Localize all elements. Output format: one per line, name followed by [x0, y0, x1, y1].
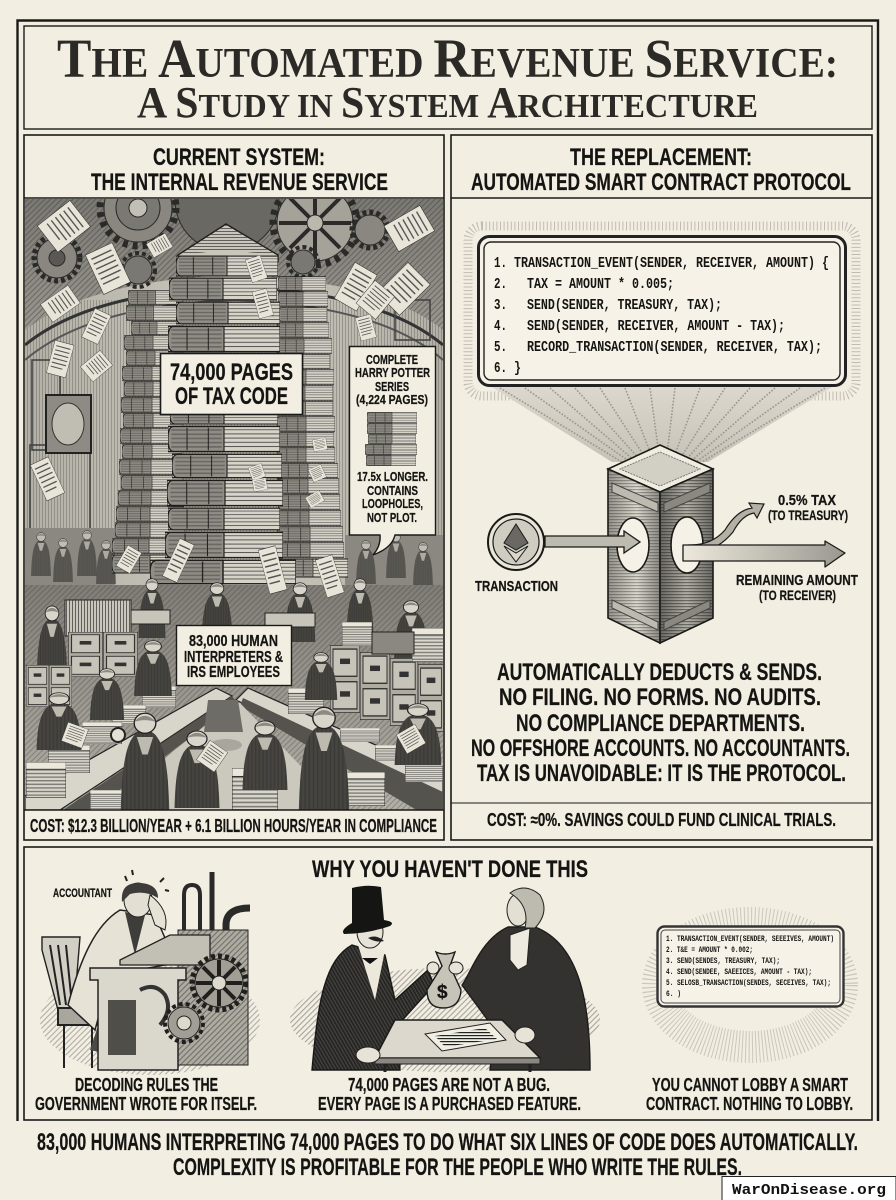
- callout: harry potter comparison: SERIES: [375, 379, 409, 394]
- title: [57, 28, 838, 127]
- callout: harry potter comparison: [350, 346, 436, 555]
- arrow: transaction into device: [545, 531, 640, 553]
- illustration: miniature contract with rays: 6. ): [666, 990, 681, 999]
- illustration: lobbyist handing money bag to official: $: [437, 982, 448, 1003]
- labels: tax flow: 0.5% TAX: [778, 492, 836, 509]
- labels: remaining amount: (TO RECEIVER): [759, 587, 836, 603]
- caption: purchased feature: [318, 1075, 581, 1114]
- gears: [165, 956, 246, 1042]
- callout: 74,000 pages of tax code: OF TAX CODE: [175, 383, 288, 410]
- panel: why you haven't done this: [24, 847, 872, 1120]
- code box: six-line smart contract: }: [514, 360, 521, 377]
- code box: six-line smart contract: 5.: [494, 339, 507, 356]
- labels: remaining amount: [736, 572, 858, 603]
- label: accountant: ACCOUNTANT: [53, 886, 112, 900]
- heading: why you haven't done this: WHY YOU HAVEN'T DONE THIS: [312, 856, 588, 883]
- labels: tax flow: (TO TREASURY): [768, 507, 848, 523]
- illustration: miniature contract with rays: 3. SEND(SENDES, TREASURY, TAX);: [666, 957, 780, 966]
- illustration: miniature contract with rays: 1. TRANSACTION_EVENT(SENDER, SEEEIVES, AMOUNT): [666, 935, 834, 944]
- code box: six-line smart contract: 6.: [494, 360, 507, 377]
- official: [462, 927, 590, 1070]
- caption: purchased feature: 74,000 PAGES ARE NOT A BUG.: [348, 1075, 550, 1095]
- caption: purchased feature: EVERY PAGE IS A PURCHASED FEATURE.: [318, 1094, 581, 1114]
- smart contract device: [608, 445, 713, 643]
- watermark: WarOnDisease.org: [732, 1182, 886, 1199]
- heading: the replacement: [471, 144, 851, 196]
- closing statement: [37, 1129, 858, 1181]
- callout: harry potter comparison: COMPLETE: [366, 352, 418, 367]
- code box: six-line smart contract: [478, 236, 846, 386]
- illustration: miniature contract with rays: 5. SELOSB_TRANSACTION(SENDES, SECEIVES, TAX);: [666, 979, 831, 988]
- heading: the replacement: THE REPLACEMENT:: [570, 144, 752, 171]
- illustration: tower of tax code books in the hall of clerks: [25, 148, 444, 812]
- lobbyist: [312, 945, 434, 1070]
- panel: current system: [24, 135, 444, 840]
- text block: what the protocol removes: [471, 659, 850, 787]
- illustration: miniature contract with rays: [658, 923, 844, 1047]
- caption: decoding rules: DECODING RULES THE: [75, 1075, 218, 1095]
- cost strip: current system: COST: $12.3 BILLION/YEAR + 6.1 BILLION HOURS/YEAR IN COMPLIANCE: [30, 816, 437, 836]
- labels: tax flow: [768, 492, 848, 523]
- ceiling: [25, 199, 443, 330]
- central stack of books: [150, 224, 328, 584]
- accountant figure: [68, 910, 168, 1030]
- illustration: lobbyist handing money bag to official: [290, 886, 600, 1072]
- heading: current system: THE INTERNAL REVENUE SERVICE: [91, 169, 388, 196]
- code box: six-line smart contract: 1.: [494, 255, 507, 272]
- caption: cannot lobby: [646, 1075, 853, 1114]
- callout: harry potter comparison: HARRY POTTER: [355, 365, 430, 380]
- table and document: [375, 1020, 540, 1058]
- paper stacks on desks: [26, 686, 443, 810]
- shading behind accountant: [40, 965, 260, 1075]
- heading: current system: CURRENT SYSTEM:: [153, 144, 325, 171]
- callout: 83,000 human interpreters: 83,000 HUMAN: [189, 633, 278, 650]
- callout: harry potter comparison: (4,224 PAGES): [356, 392, 428, 407]
- code box: six-line smart contract: 4.: [494, 318, 507, 335]
- rear desks and clerks: [37, 578, 425, 665]
- callout: 83,000 human interpreters: [176, 626, 292, 686]
- filing cabinets: [26, 622, 444, 732]
- title: THE AUTOMATED REVENUE SERVICE:: [57, 28, 838, 89]
- machine pipes: [184, 872, 250, 945]
- callout: 83,000 human interpreters: IRS EMPLOYEES: [187, 664, 280, 681]
- callout: 74,000 pages of tax code: [160, 354, 302, 414]
- rays: [658, 923, 842, 1047]
- code box: six-line smart contract: TAX = AMOUNT * 0.005;: [527, 276, 674, 293]
- side stacks of books: [112, 277, 348, 577]
- shading behind figures: [290, 968, 600, 1072]
- callout: harry potter comparison: CONTAINS: [367, 483, 418, 498]
- code box: six-line smart contract: 3.: [494, 297, 507, 314]
- code box: six-line smart contract: SEND(SENDER, TREASURY, TAX);: [527, 297, 722, 314]
- office floor: [25, 585, 443, 810]
- icon: transaction coin: [488, 514, 544, 570]
- ornate desk: [90, 968, 186, 1070]
- heading: current system: [91, 144, 388, 196]
- code box: six-line smart contract: 2.: [494, 276, 507, 293]
- watermark: [722, 1176, 896, 1200]
- central floor, lamp: [165, 703, 302, 810]
- top hat: [343, 886, 392, 934]
- label: transaction: TRANSACTION: [475, 578, 558, 595]
- papers hanging from stack: [116, 538, 344, 598]
- light rays around code box: [468, 226, 856, 462]
- caption: decoding rules: [35, 1075, 257, 1114]
- callout: 74,000 pages of tax code: 74,000 PAGES: [170, 359, 293, 386]
- illustration: stressed accountant at decoding machine: [40, 870, 260, 1075]
- flying papers: [30, 200, 435, 501]
- arrow: tax to treasury: [690, 503, 764, 551]
- labels: remaining amount: REMAINING AMOUNT: [736, 572, 858, 589]
- caption: decoding rules: GOVERNMENT WROTE FOR ITSELF.: [35, 1094, 257, 1114]
- background crowd: [25, 528, 115, 585]
- clerks in robes: [36, 641, 441, 812]
- icon: stack of five books: [365, 413, 417, 465]
- callout: 83,000 human interpreters: INTERPRETERS &: [184, 649, 283, 666]
- callout: harry potter comparison: NOT PLOT.: [367, 510, 417, 525]
- code box: six-line smart contract: SEND(SENDER, RECEIVER, AMOUNT - TAX);: [527, 318, 785, 335]
- money bag: [427, 952, 461, 1008]
- chair: [42, 937, 80, 1010]
- illustration: miniature contract with rays: 4. SEND(SENDEE, SAEEICES, AMOUNT - TAX);: [666, 968, 812, 977]
- callout: harry potter comparison: 17.5x LONGER.: [357, 469, 428, 484]
- illustration: miniature contract with rays: 2. T&E = AMOUNT * 0.002;: [666, 946, 753, 955]
- gears: [32, 199, 389, 289]
- long clerk desks: [25, 688, 443, 812]
- wall panels and portrait: [30, 300, 430, 540]
- code box: six-line smart contract: RECORD_TRANSACTION(SENDER, RECEIVER, TAX);: [527, 339, 822, 356]
- panel: the replacement: [451, 135, 872, 840]
- arrow: remaining amount to receiver: [683, 541, 845, 567]
- title: A STUDY IN SYSTEM ARCHITECTURE: [137, 78, 758, 127]
- callout: harry potter comparison: LOOPHOLES,: [362, 496, 423, 511]
